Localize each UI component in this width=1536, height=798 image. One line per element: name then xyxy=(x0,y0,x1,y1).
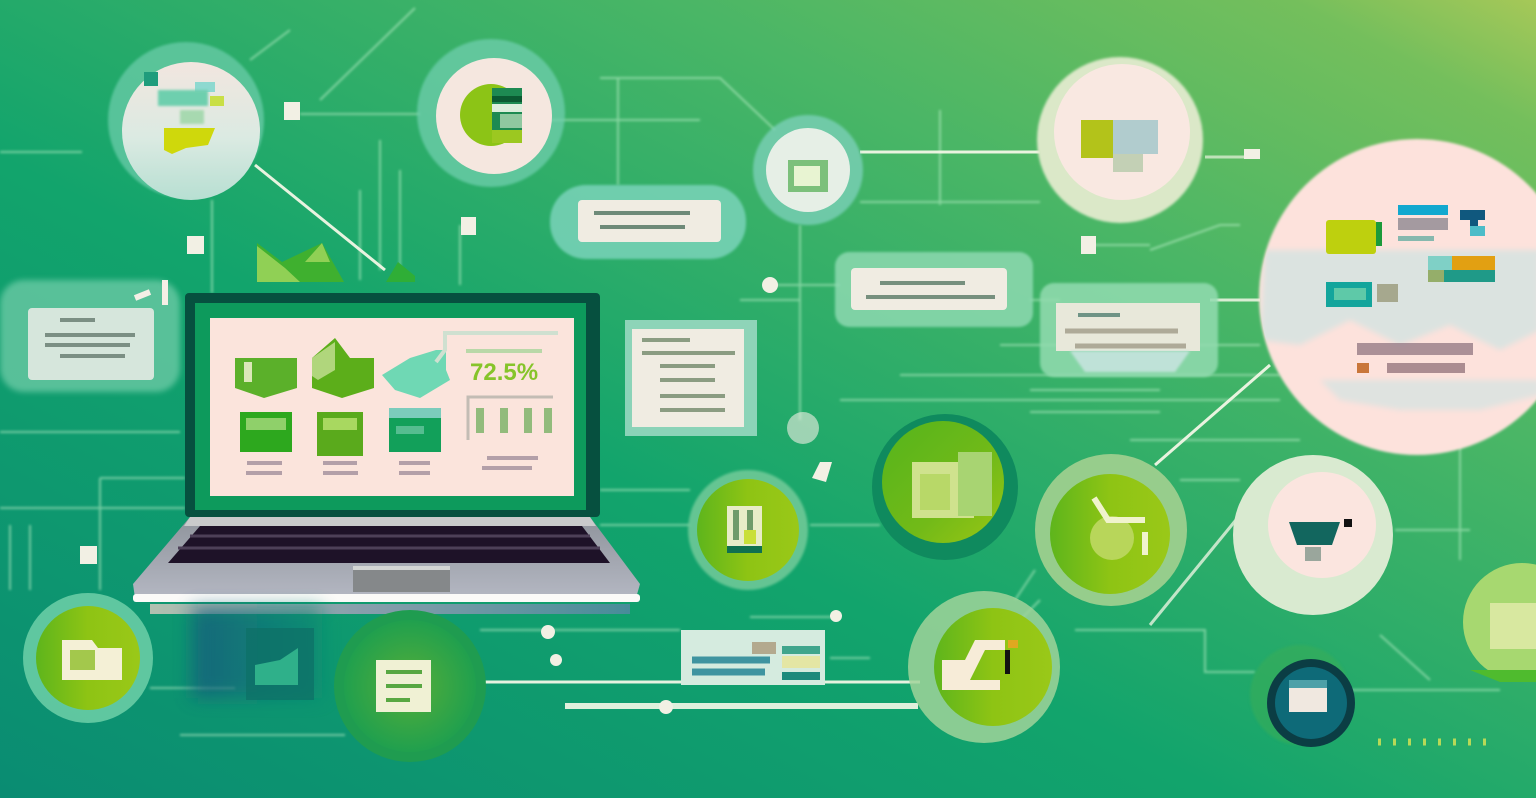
card: top center xyxy=(550,185,746,259)
circle: pale lime right edge xyxy=(1463,563,1536,682)
circle: lime bottom left xyxy=(23,593,153,723)
circle: top right xyxy=(1037,57,1203,223)
laptop screen frame xyxy=(185,293,600,517)
screen stat panel: 72.5% xyxy=(470,359,538,386)
circle: top center green xyxy=(417,39,565,187)
circle: pale right xyxy=(1233,455,1393,615)
circle: top middle xyxy=(753,115,863,225)
card: right xyxy=(1040,283,1218,377)
circle: dark teal bottom right xyxy=(1250,645,1355,747)
highlighted connectors xyxy=(255,152,1270,682)
laptop front edge xyxy=(133,594,640,602)
data strip xyxy=(681,630,825,685)
laptop keyboard xyxy=(168,526,610,563)
card: left xyxy=(0,280,180,392)
laptop shadow xyxy=(150,604,630,614)
laptop xyxy=(133,293,640,614)
circle: top left xyxy=(108,42,264,200)
large circle: right xyxy=(1259,139,1536,455)
circle: green bottom center xyxy=(334,610,486,762)
screen stat panel xyxy=(436,333,558,440)
card: middle tall xyxy=(625,320,757,436)
chart peaks behind laptop xyxy=(257,243,415,282)
dotted accent xyxy=(1378,738,1490,746)
thick lower connector xyxy=(565,703,918,709)
circle: lime right center xyxy=(1035,454,1187,606)
screen captions xyxy=(246,458,538,473)
circle: lime center xyxy=(688,470,808,590)
screen tiles xyxy=(235,338,450,456)
circle: center dark green xyxy=(872,414,1018,560)
laptop screen xyxy=(210,318,574,496)
laptop base xyxy=(133,517,640,598)
card: center right xyxy=(835,252,1033,327)
dark shadow under laptop xyxy=(192,608,322,700)
circle: lime bottom center-right xyxy=(908,591,1060,743)
laptop trackpad xyxy=(353,566,450,570)
connector nodes xyxy=(80,102,1260,714)
